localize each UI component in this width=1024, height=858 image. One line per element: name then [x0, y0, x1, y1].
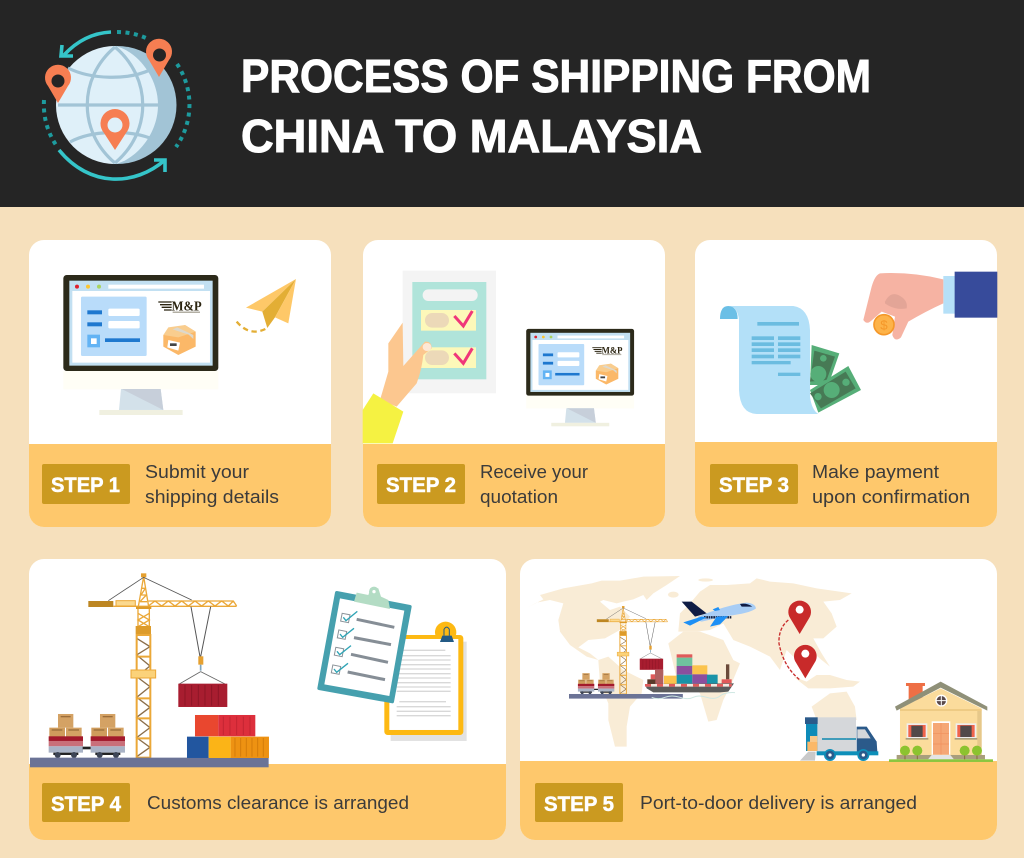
panel: step 5: [520, 559, 997, 840]
panel: step 2: [363, 240, 665, 527]
step 5 description: Port-to-door delivery is arranged: [640, 793, 917, 813]
icon: location pins with route: [779, 601, 817, 680]
step 2 badge: STEP 2: [386, 474, 456, 497]
header band: [0, 0, 1024, 207]
icon: receipt with banknotes: [720, 306, 861, 414]
panel: step 4: [29, 559, 506, 840]
step 2 badge: [377, 464, 465, 504]
step 1 description: shipping details: [145, 487, 279, 507]
step 1 badge: STEP 1: [51, 474, 120, 497]
illustration: port crane with cargo train: [30, 573, 269, 767]
step 1 badge: [42, 464, 130, 504]
step 2 description: Receive your: [480, 462, 588, 482]
step 5 badge: [535, 783, 623, 822]
icon: computer monitor with shipping form: [63, 275, 218, 415]
icon: delivery truck: [800, 717, 878, 761]
icon: hand dropping coin: [863, 272, 997, 340]
step 5 badge: STEP 5: [544, 793, 614, 816]
illustration: port crane with cargo train: [569, 606, 683, 699]
icon: house: [889, 682, 993, 762]
step 3 badge: [710, 464, 798, 504]
step 3 description: Make payment: [812, 462, 939, 482]
icon: hand dropping coin: $: [880, 317, 888, 332]
icon: hand holding checklist: [363, 271, 496, 443]
icon: airplane: [682, 602, 756, 627]
step 4 badge: STEP 4: [51, 793, 121, 816]
icon: computer monitor with shipping form: M&P: [172, 300, 202, 315]
step 2 description: [480, 462, 588, 507]
icon: customs documents and clipboard: [319, 587, 467, 741]
step 1 description: [145, 462, 279, 507]
illustration: container ship: [645, 654, 735, 699]
illustration: container stack: [187, 715, 269, 758]
step 1 description: Submit your: [145, 462, 249, 482]
panel: step 1: [29, 240, 331, 527]
step 2 description: quotation: [480, 487, 558, 507]
icon: computer monitor with quotation: M&P: [602, 346, 623, 357]
panel: step 3: [695, 240, 997, 527]
step 4 description: Customs clearance is arranged: [147, 793, 409, 813]
illustration: world map: [527, 576, 860, 747]
step 3 description: upon confirmation: [812, 487, 970, 507]
step 3 badge: STEP 3: [719, 474, 789, 497]
title: PROCESS OF SHIPPING FROM: [241, 50, 871, 102]
step 3 description: [812, 462, 970, 507]
title: [241, 50, 871, 162]
step 4 badge: [42, 783, 130, 822]
title: CHINA TO MALAYSIA: [241, 110, 702, 162]
icon: globe with location pins: [44, 32, 189, 179]
icon: computer monitor with quotation: [526, 329, 634, 426]
icon: paper plane: [237, 279, 296, 332]
